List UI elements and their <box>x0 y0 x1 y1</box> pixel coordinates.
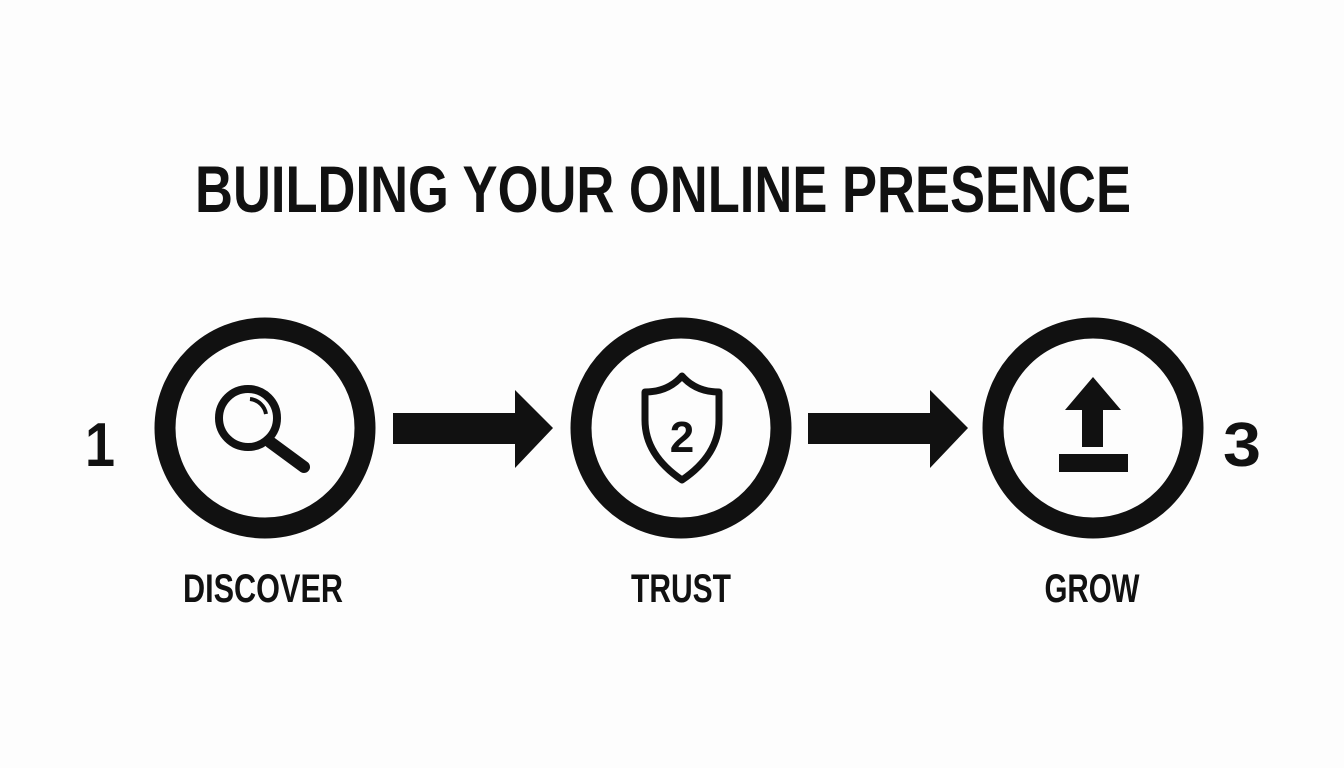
step 1: discover <box>165 328 365 528</box>
step 2: trust <box>581 328 781 528</box>
label: grow: GROW <box>1044 567 1140 611</box>
arrow 2 <box>808 390 968 468</box>
icon: magnifier <box>219 389 304 467</box>
step 3: grow <box>993 328 1193 528</box>
icon: upload arrow <box>1059 377 1128 472</box>
label: trust: TRUST <box>631 567 731 611</box>
label: discover: DISCOVER <box>183 567 343 611</box>
arrow 1 <box>393 390 553 468</box>
title: BUILDING YOUR ONLINE PRESENCE <box>195 152 1131 226</box>
step number 1: 1 <box>85 411 115 480</box>
icon: shield with 2: 2 <box>670 413 694 462</box>
step number 3: 3 <box>1223 411 1261 480</box>
icon: shield with 2 <box>645 376 719 480</box>
